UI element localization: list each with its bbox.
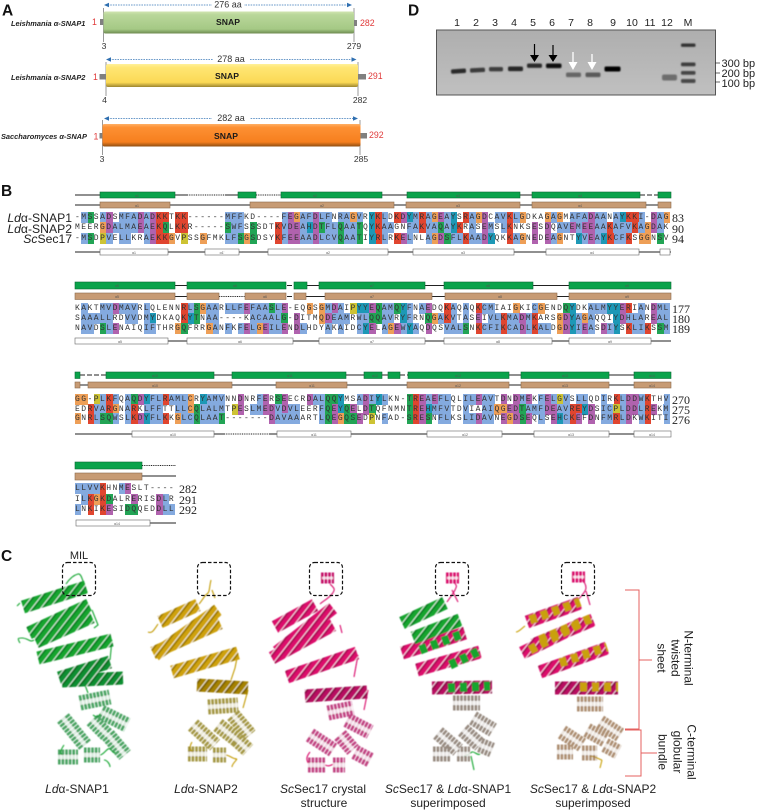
alignment block 4: LLVVKHNMESLT---- [75,484,175,493]
caption: Sc Sec17 crystal structure: structure [301,796,348,810]
Leishmania alpha-SNAP2 construct: 1 [93,72,98,82]
alignment numbers block 1: 83 [672,211,684,225]
alignment numbers block 2 [672,302,690,336]
alignment block 4 [75,483,175,515]
tracks block 4 [75,462,176,526]
tracks block 3: α14 [649,433,655,437]
tracks block 3: α10 [170,433,176,437]
panel letter B: B [1,183,12,200]
tracks block 1: α4 [590,251,594,255]
alignment block 1: -MSDPVELLKRAEKKGVPSSGFMKLFSGSDSYKFEEAADLCVQAATIYRLRKELNLAGDSFLKAADYQKKAGNEDEAGNTYVEAYKCFKSGGNSV [75,234,670,243]
tracks block 3: α13 [562,384,568,388]
alignment block 1 [75,212,670,244]
panel letter C: C [1,548,12,565]
Leishmania alpha-SNAP2 construct: SNAP [215,71,239,81]
caption: superimposed with SNAP1: superimposed [410,796,486,810]
tracks block 2 [75,282,671,344]
caption: Sc Sec17 crystal structure: ScSec17 crystal [280,782,366,796]
Saccharomyces alpha-SNAP construct: SNAP [214,131,238,141]
Saccharomyces alpha-SNAP construct [1,113,384,164]
lane labels: 11 [645,17,656,29]
lane labels: 5 [530,17,536,29]
size markers [715,58,755,90]
Leishmania alpha-SNAP1 construct: 279 [347,41,361,51]
label: N-terminal twisted sheet: sheet [654,643,668,673]
structure: Ld alpha-SNAP2 [148,580,250,767]
alignment numbers block 3: 276 [672,413,690,427]
panel letter A: A [2,2,13,20]
tracks block 3: α12 [455,374,461,378]
alignment numbers block 2: 189 [672,322,690,336]
tracks block 1: α1 [135,194,139,198]
tracks block 2: α6 [263,295,267,299]
caption: superimposed with SNAP2: superimposed [555,796,631,810]
tracks block 1: α1 [135,204,139,208]
alignment block 1: -MSSADSMFADADKKTKK------MFFKD----FEGAFDLFNRAGVRYKLDKDYMRAGEAYSRAGDCAVKLGDKAGAGMAFADAANAYKKI-DAG [75,213,670,222]
caption: Ld alpha-SNAP1: Ldα-SNAP1 [45,782,109,796]
tracks block 2: α9 [625,284,629,288]
alignment block 4: LNKIKESIDQQEDDLL [75,505,175,514]
alignment block 1: MEERGDALMAEAEKQLKKR-----SWFSSSDTKVDEAHDTFLQAATQYKAAGNFAKVAQAYKRASEMSLKNKSESDQAVEMEEAAKAFVKAGDAK [75,223,670,232]
tracks block 2: α5 [115,284,119,288]
Leishmania alpha-SNAP1 construct [11,0,375,51]
alignment numbers block 1: 90 [672,222,684,236]
panel letter D: D [408,2,419,20]
lane labels: 8 [587,17,593,29]
Leishmania alpha-SNAP1 construct: 282 [360,18,375,28]
tracks block 1: α3 [456,194,460,198]
panel D: agarose gel [408,2,755,95]
tracks block 3: α12 [462,433,468,437]
Saccharomyces alpha-SNAP construct: Saccharomyces α-SNAP [1,132,87,141]
Leishmania alpha-SNAP1 construct: Leishmania α-SNAP1 [11,19,85,28]
Leishmania alpha-SNAP1 construct: 1 [92,17,97,27]
tracks block 2: α6 [233,284,237,288]
alignment block 2: SAAALLRDVVDMYDKAQKYTNAA----KACAALG-DITMQDEAMRWLQQAVRYFRNQGAKVTASEIVLKMADMKARSGDYAGAQQIYDHLAREAL [75,314,670,323]
tracks block 3: α10 [152,384,158,388]
tracks block 3: α10 [152,374,158,378]
lane labels: 9 [610,17,616,29]
tracks block 3: α11 [311,433,317,437]
size markers: 200 bp [722,68,755,80]
Leishmania alpha-SNAP2 construct: Leishmania α-SNAP2 [11,73,86,82]
MIL box 4 [436,562,468,596]
caption: superimposed with SNAP1: ScSec17 & Ldα-SNAP1 [385,782,511,796]
alignment numbers block 1: 94 [672,232,684,246]
alignment block 3: GG-PLKFQAQDYFLRAMLCRYAMVNNDNRFERSEECRDALQQYMSADIYLKN-TREAEFLQLILEAVTDNDMEKFELGVSLLQDIRKLDDWKTHV [75,395,670,404]
alignment numbers block 1 [672,211,684,246]
Saccharomyces alpha-SNAP construct: 1 [94,132,98,142]
Saccharomyces alpha-SNAP construct: 292 [369,130,384,140]
panel A: domain architecture [1,0,384,164]
label: C-terminal globular bundle: globular [670,731,684,773]
tracks block 3: α11 [309,384,315,388]
alignment numbers block 3: 270 [672,393,690,407]
label: C-terminal globular bundle: C-terminal [684,724,698,780]
gel image [436,30,716,95]
label: N-terminal twisted sheet: twisted [668,639,682,677]
tracks block 2: α7 [370,295,374,299]
MIL box 2 [198,562,230,596]
tracks block 3: α13 [568,433,574,437]
tracks block 2: α6 [238,340,242,344]
Leishmania alpha-SNAP2 construct: 291 [368,71,383,81]
tracks block 2: α5 [115,295,119,299]
tracks block 2: α8 [486,284,490,288]
alignment numbers block 2: 180 [672,312,690,326]
alignment block 3: GNRLSQWSLKDYFLKKGLCQLAAT-------DAVAAARTLQEGQSEDPNFAD-SRESNFLKSLIDAVNEGDSEQLSEHCKEFDNFMRLDKWKITI [75,414,670,423]
alignment row labels: Ldα-SNAP1 [7,211,72,225]
alignment block 2 [75,303,670,334]
white arrows lanes 7 and 8 [568,52,596,70]
tracks block 2: α7 [370,284,374,288]
structure: Ld alpha-SNAP1 [17,574,127,767]
tracks block 3: α12 [372,374,378,378]
alignment block 3 [75,394,670,424]
label: N-terminal twisted sheet: N-terminal [682,630,696,686]
lane labels [454,17,692,29]
Leishmania alpha-SNAP2 construct: 278 aa [217,54,245,64]
tracks block 3 [75,372,671,437]
tracks block 1: α4 [578,194,582,198]
alignment numbers block 3: 275 [672,403,690,417]
tracks block 1 [75,192,671,255]
tracks block 3: α14 [649,384,655,388]
MIL label: MIL [70,550,88,562]
tracks block 1: α3 [461,251,465,255]
Leishmania alpha-SNAP1 construct: SNAP [216,17,240,27]
lane labels: M [684,17,692,29]
tracks block 2: α5 [118,340,122,344]
lane labels: 2 [473,17,479,29]
alignment numbers block 4: 292 [179,503,197,517]
alignment numbers block 4: 291 [179,492,197,506]
alignment row labels: Ldα-SNAP2 [7,222,72,236]
lane labels: 1 [454,17,460,29]
tracks block 3: α11 [287,374,293,378]
structure: Sc Sec17 and Ld alpha-SNAP2 superimposed [516,577,620,768]
Leishmania alpha-SNAP2 construct: 282 [353,95,367,105]
Leishmania alpha-SNAP1 construct: 3 [102,41,107,51]
panel B: secondary structure tracks [1,183,671,526]
lane labels: 6 [549,17,555,29]
lane labels: 10 [626,17,638,29]
size markers: 300 bp [722,58,755,70]
tracks block 3: α12 [455,384,461,388]
Leishmania alpha-SNAP2 construct [11,54,383,105]
alignment row labels: ScSec17 [23,232,72,246]
label: N-terminal twisted sheet [654,630,696,686]
Leishmania alpha-SNAP2 construct: 4 [102,95,107,105]
tracks block 2: α8 [496,340,500,344]
MIL box 3 [310,562,342,596]
Saccharomyces alpha-SNAP construct: 282 aa [217,113,245,123]
tracks block 3: α14 [649,374,655,378]
alignment block 2: NAVDSLENAIQIFTHRGQFRRGANFKFELGEILENDLHDYAKAIDCYELAGEWYAQDQSVALSNKCFIKCADLKALDGDYIEASDIYSKLIKSSM [75,324,670,333]
alignment block 4: ILKGKDALRERISDLR [75,494,175,504]
black arrows lanes 5 and 6 [530,44,558,62]
alignment block 3: EDRVARGNARKLFFTTLLCQLALMTPESLMEDVDVLEERFQEYQELDTQFNMNTREHMFVTDVIAAIQGEDTAMFDEAVREYDSICPLDDLREKM [75,405,670,414]
tracks block 2: α9 [625,295,629,299]
MIL box 5 [562,562,594,596]
bracket: C-terminal globular bundle [625,730,657,776]
tracks block 1: α1' [220,251,225,255]
structure: Sc Sec17 and Ld alpha-SNAP1 superimposed [402,578,493,770]
lane labels: 3 [492,17,498,29]
MIL box 1 [62,562,96,596]
tracks block 1: α3 [456,204,460,208]
alignment row labels [7,211,72,246]
caption: Ld alpha-SNAP2: Ldα-SNAP2 [174,782,238,796]
label: C-terminal globular bundle [656,724,698,780]
alignment block 2: KAKTMVDMAVRLQLENNRLSGAARLLFEFAASLE-EQGSGMDAIPYYEQAMQYFNAEDQKAQAQKCMIAIGKICGENDQYDKALMYYERIANDML [75,304,670,313]
bracket: N-terminal twisted sheet [625,590,652,729]
panel C: protein structures [1,548,698,810]
alignment numbers block 3 [672,393,690,427]
tracks block 2: α9 [608,340,612,344]
tracks block 4: α14 [114,522,120,526]
tracks block 2: α8 [498,295,502,299]
Saccharomyces alpha-SNAP construct: 285 [354,154,368,164]
tracks block 1: α2 [326,251,330,255]
alignment numbers block 2: 177 [672,302,690,316]
tracks block 3: α13 [562,374,568,378]
caption: superimposed with SNAP2: ScSec17 & Ldα-SNAP2 [530,782,656,796]
tracks block 1: α2 [313,194,317,198]
lane labels: 12 [661,17,673,29]
lane labels: 7 [568,17,574,29]
structure: Sc Sec17 [272,578,370,766]
tracks block 1: α1 [132,251,136,255]
tracks block 1: α4 [578,204,582,208]
alignment numbers block 4 [179,482,197,517]
lane labels: 4 [511,17,517,29]
Saccharomyces alpha-SNAP construct: 3 [100,154,105,164]
alignment numbers block 4: 282 [179,482,197,496]
tracks block 2: α7 [370,340,374,344]
size markers: 100 bp [722,78,755,90]
label: C-terminal globular bundle: bundle [656,734,670,770]
tracks block 1: α2 [320,204,324,208]
